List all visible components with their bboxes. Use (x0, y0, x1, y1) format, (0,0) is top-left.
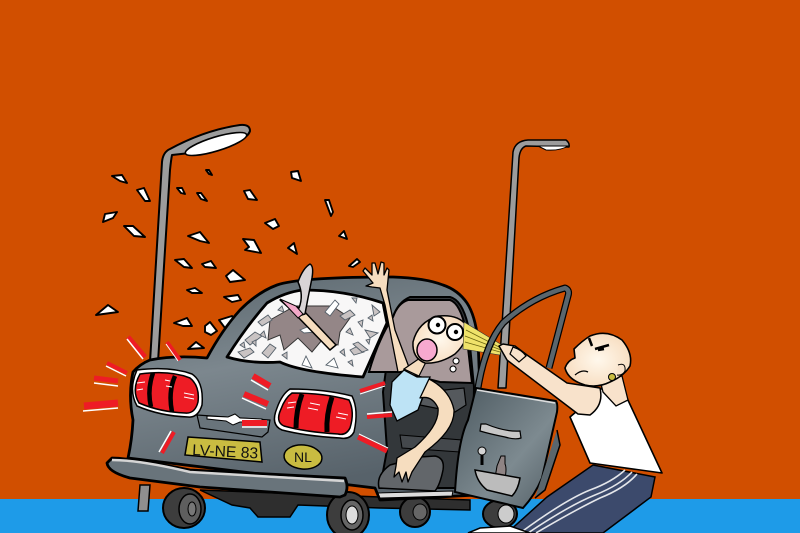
lower arm (394, 379, 454, 482)
eyes (428, 316, 446, 334)
door handle (480, 424, 521, 439)
neck (600, 376, 628, 406)
street lamp: right (498, 140, 569, 388)
frown (575, 371, 588, 375)
neck (404, 358, 428, 376)
sill highlight (378, 491, 453, 498)
screaming mouth (417, 339, 437, 361)
street lamp: left (138, 125, 250, 511)
NL sticker: NL (294, 449, 312, 465)
right tail light (274, 389, 356, 438)
attacker (468, 333, 662, 533)
car body (107, 277, 480, 500)
door pocket (475, 470, 520, 496)
trousers (507, 465, 655, 533)
boot badge (197, 414, 270, 437)
windscreen (227, 290, 387, 377)
interior opening (380, 297, 474, 488)
angry brows and eye (589, 338, 609, 350)
open car door (455, 288, 569, 508)
background: blue ground (0, 499, 800, 533)
windscreen hole (268, 306, 350, 352)
front wheel right (483, 500, 517, 528)
door window frame (478, 288, 569, 388)
bottle in pocket (495, 456, 506, 478)
earrings (450, 358, 459, 372)
seat panel (400, 435, 462, 452)
torso top (390, 370, 430, 421)
rear wheel right (327, 492, 369, 533)
tyres and underbody (163, 488, 517, 533)
license plate: LV-NE 83 (192, 442, 259, 462)
bumper (107, 458, 347, 497)
woman driver (363, 262, 502, 482)
arms (499, 344, 601, 415)
license plate (185, 437, 262, 462)
red impact streaks (83, 337, 392, 453)
seat cushion (378, 456, 443, 491)
door panel (455, 388, 557, 508)
hair being pulled (463, 322, 502, 355)
rear wheel left (163, 488, 205, 528)
head (565, 333, 631, 386)
front wheel left (400, 497, 430, 527)
vest (570, 387, 662, 473)
exhaust and axle (200, 490, 470, 517)
NL sticker (283, 443, 323, 471)
flying glass shards (96, 170, 360, 349)
window winder (478, 447, 486, 465)
left tail light (132, 369, 202, 417)
ear and earring (617, 364, 625, 375)
burglar's leg through windscreen (280, 264, 336, 350)
side window (369, 300, 472, 383)
raised arm (363, 262, 410, 372)
cracks (238, 298, 380, 368)
fingers of the second hand (510, 347, 526, 362)
dashboard panel (420, 388, 466, 412)
shoe (468, 526, 530, 533)
head (413, 316, 467, 363)
